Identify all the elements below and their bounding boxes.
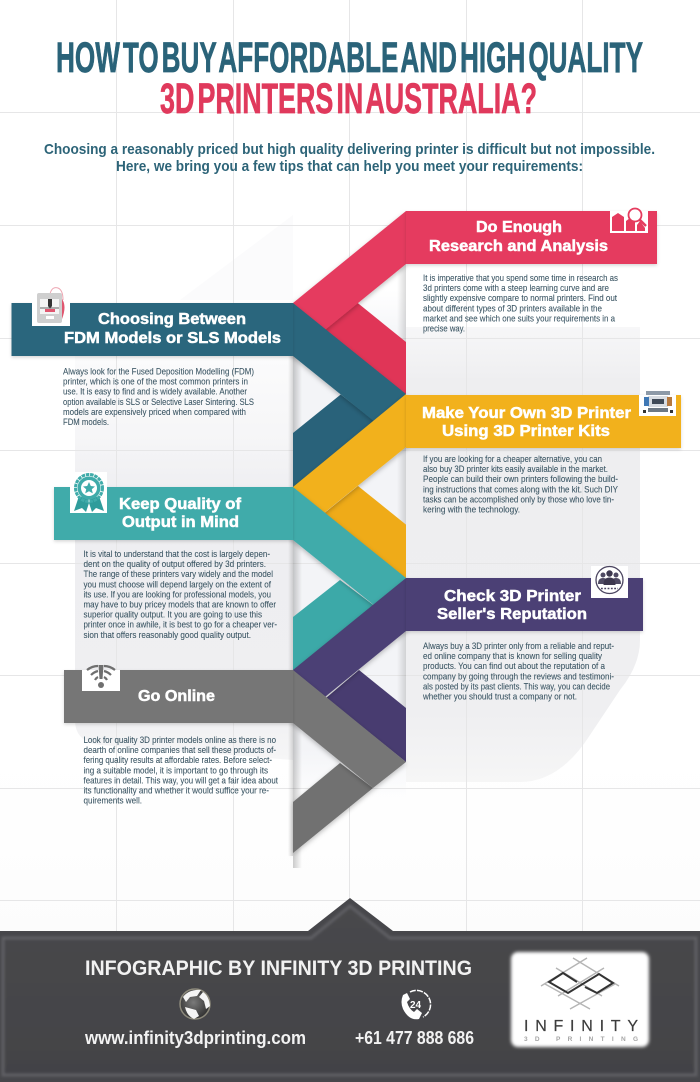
body text: printer, which is one of the most common printers in [63, 377, 248, 387]
banner [54, 487, 293, 540]
footer inner glow [3, 906, 696, 1075]
ribbon: red lower fold [322, 303, 406, 398]
ribbon: dark teal lower fold [293, 394, 376, 489]
ribbon: gray upper [293, 670, 406, 788]
body text: If you are looking for a cheaper alternative, you can [423, 454, 602, 464]
intro text [44, 141, 655, 175]
website: www.infinity3dprinting.com [84, 1028, 306, 1048]
heading: Research and Analysis [429, 238, 608, 255]
icon: 24 hour phone [402, 990, 431, 1019]
heading: Seller's Reputation [437, 606, 587, 623]
body text [84, 549, 277, 640]
body text: slightly expensive compare to normal printers. Find out [423, 293, 617, 303]
heading: Choosing Between [98, 311, 246, 328]
icon: 24 hour phone: 24 [410, 1000, 422, 1011]
panel: FDM or SLS models [12, 288, 293, 427]
body text: company by going through the reviews and testimoni- [423, 671, 614, 681]
body text: use. It is easy to find and is widely available. Another [63, 387, 247, 397]
ribbon: purple lower fold [326, 670, 406, 762]
body text: The range of these printers vary widely and the model [84, 569, 273, 579]
body text: sion that offers reasonably good quality output. [84, 630, 251, 640]
ribbon: dark teal upper [293, 303, 406, 447]
body text: FDM models. [63, 417, 109, 427]
body text: People can build their own printers following the build- [423, 474, 618, 484]
icon: 3D printer [32, 288, 70, 326]
body text: products. You can find out about the reputation of a [423, 661, 605, 671]
ribbon: gray lower fold [293, 763, 373, 853]
body text: Always look for the Fused Deposition Modelling (FDM) [63, 366, 254, 376]
body text: Look for quality 3D printer models online as there is no [84, 735, 276, 745]
heading: Output in Mind [122, 514, 239, 531]
logo infinity mark [549, 973, 613, 993]
body text: models are expensively priced when compared with [63, 407, 246, 417]
body text: printer once in awhile, it is best to go for a cheaper ver- [84, 620, 277, 630]
heading [64, 311, 281, 347]
body text: superior quality output. It you are going to use this [84, 610, 262, 620]
body text: may have to buy pricey models that are known to offer [84, 600, 276, 610]
panel: seller's reputation [406, 566, 643, 702]
heading: Do Enough [476, 219, 562, 236]
panel: make your own printer [406, 391, 681, 514]
body text: option available is SLS or Selective Laser Sintering. SLS [63, 397, 254, 407]
body text: It is imperative that you spend some time in research as [423, 273, 618, 283]
body text: also buy 3D printer kits easily available in the market. [423, 464, 608, 474]
body text: dent on the quality of output offered by 3d printers. [84, 559, 266, 569]
panel: keep quality in mind [54, 472, 293, 640]
body text: market and see which one suits your requirements in a [423, 313, 615, 323]
body text: you must choose will depend largely on the extent of [84, 579, 271, 589]
body text [84, 735, 278, 806]
heading [429, 219, 608, 255]
phone number: +61 477 888 686 [355, 1028, 474, 1048]
intro text: Here, we bring you a few tips that can help you meet your requirements: [116, 158, 583, 175]
heading: FDM Models or SLS Models [64, 330, 281, 347]
ribbon: green teal lower fold [293, 580, 376, 674]
heading: Make Your Own 3D Printer [422, 405, 631, 422]
body text: tasks can be accomplished only by those who love tin- [423, 494, 614, 504]
body text: Always buy a 3D printer only from a reliable and reput- [423, 641, 614, 651]
body text: ing a suitable model, it is important to go through its [84, 765, 268, 775]
heading: Using 3D Printer Kits [442, 423, 610, 440]
ribbon: green teal upper [293, 487, 406, 631]
body text: kering with the technology. [423, 504, 520, 514]
body text: about different types of 3D printers available in the [423, 303, 602, 313]
logo tagline: 3D PRINTING [524, 1036, 638, 1043]
ribbon: yellow lower fold [322, 486, 406, 582]
icon: wifi alert [82, 665, 120, 691]
body text [422, 641, 614, 702]
logo background [511, 952, 649, 1047]
logo card [511, 952, 649, 1047]
heading: Go Online [138, 688, 215, 705]
heading [422, 405, 631, 440]
heading [437, 588, 587, 623]
banner [64, 670, 293, 723]
banner [406, 578, 643, 631]
heading: Keep Quality of [119, 496, 242, 513]
body text: fering quality results at affordable rates. Before select- [84, 755, 272, 765]
icon: printer kit [639, 391, 676, 416]
icon: quality rosette [70, 472, 107, 513]
body text: ed online company that is known for selling quality [423, 651, 602, 661]
body text: als posted by its past clients. This way, you can decide [423, 681, 610, 691]
footer [0, 898, 700, 1082]
body text: its functionality and whether it would suffice your re- [84, 786, 269, 796]
body text: quirements well. [84, 796, 142, 806]
logo lattice [541, 958, 619, 1009]
banner [406, 395, 681, 448]
ribbon: red upper [293, 211, 406, 356]
heading [119, 496, 242, 531]
body text [63, 366, 254, 427]
body text: precise way. [423, 324, 465, 334]
footer panel [0, 898, 700, 1082]
panel: research and analysis [406, 208, 657, 334]
body text: its use. If you are looking for professional models, you [84, 589, 271, 599]
icon: chart and magnifier [610, 208, 648, 233]
heading: Check 3D Printer [444, 588, 581, 605]
ribbon: yellow upper [293, 394, 406, 538]
body text: ing instructions that comes along with the kit. Such DIY [423, 484, 618, 494]
faded 3D printer background [75, 215, 640, 800]
body text: 3d printers come with a steep learning curve and are [423, 283, 609, 293]
body text: dearth of online companies that sell these products of- [84, 745, 276, 755]
chevron column shadows [288, 264, 406, 868]
footer heading: INFOGRAPHIC BY INFINITY 3D PRINTING [85, 957, 472, 980]
intro text: Choosing a reasonably priced but high quality delivering printer is difficult but not impossible. [44, 141, 655, 158]
title [56, 34, 643, 123]
body text [423, 273, 618, 334]
banner [12, 303, 293, 356]
body text: It is vital to understand that the cost is largely depen- [84, 549, 270, 559]
body text: features in detail. This way, you will get a fair idea about [84, 775, 278, 785]
logo wordmark: INFINITY [524, 1018, 638, 1035]
icon: globe [180, 989, 210, 1019]
banner [406, 211, 657, 264]
body text: whether you should trust a company or not. [422, 692, 577, 702]
panel: go online [64, 665, 293, 806]
chevron ribbons [293, 211, 406, 853]
ribbon: purple upper [293, 578, 406, 723]
icon: customers circle [591, 566, 628, 598]
body text [423, 454, 618, 514]
